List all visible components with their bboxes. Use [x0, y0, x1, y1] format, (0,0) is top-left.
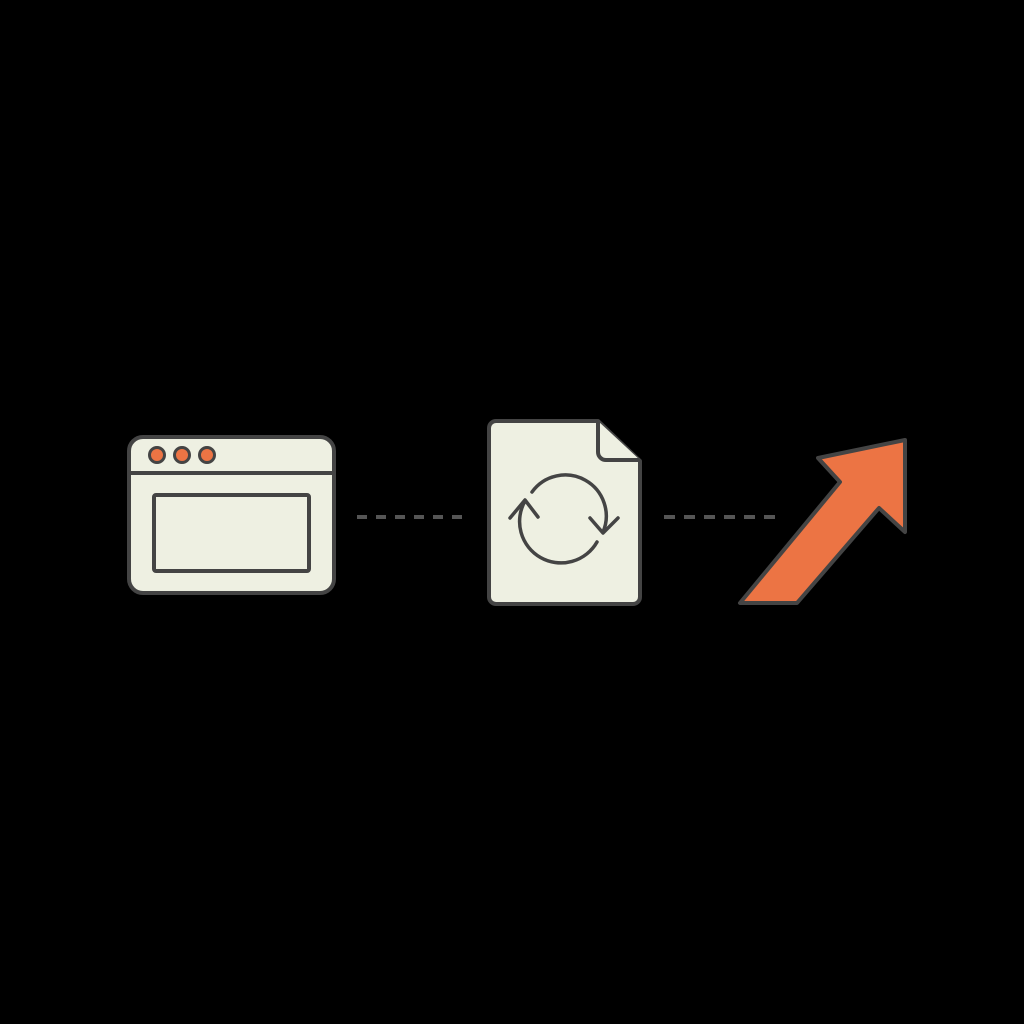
icon: browser window	[129, 437, 334, 593]
arrow: dashed connector 2	[664, 515, 784, 519]
icon: orange growth arrow	[740, 440, 905, 603]
arrow: dashed connector 1	[357, 515, 468, 519]
icon: document with refresh cycle	[489, 421, 640, 604]
